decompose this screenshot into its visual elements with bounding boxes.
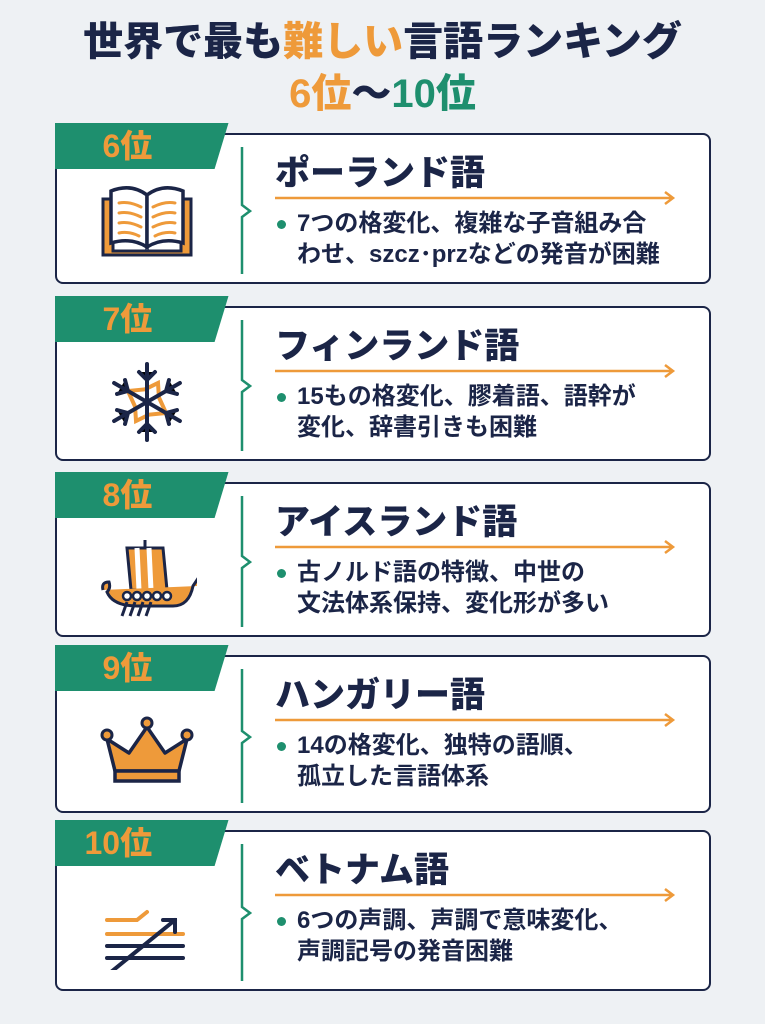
heading: ハンガリー語 <box>275 676 485 715</box>
divider line <box>240 320 252 451</box>
arrow <box>275 713 675 727</box>
text: 変化、辞書引きも困難 <box>297 414 537 441</box>
icon: viking ship <box>101 540 197 616</box>
tab: 10位 <box>54 820 228 866</box>
text: わせ、szcz･przなどの発音が困難 <box>297 241 660 268</box>
arrow <box>275 540 675 554</box>
title <box>83 20 682 116</box>
text: 7つの格変化、複雑な子音組み合 <box>297 210 646 237</box>
text: 14の格変化、独特の語順、 <box>297 732 588 759</box>
tab: 6位 <box>54 123 228 169</box>
tab: 8位: 8位 <box>102 477 152 513</box>
text: 声調記号の発音困難 <box>297 938 513 965</box>
icon: crown <box>100 716 194 783</box>
panel: rank 8 <box>55 482 711 637</box>
tab: 8位 <box>54 472 228 518</box>
tab: 10位: 10位 <box>84 825 152 861</box>
panel: rank 7 <box>55 306 711 461</box>
divider line <box>240 147 252 274</box>
title: 世界で最も難しい言語ランキング <box>83 20 682 64</box>
panel: rank 10 <box>55 830 711 991</box>
divider line <box>240 496 252 627</box>
divider line <box>240 844 252 981</box>
text: 古ノルド語の特徴、中世の <box>297 559 585 586</box>
panel: rank 6 <box>55 133 711 284</box>
tab: 9位 <box>54 645 228 691</box>
heading: ポーランド語 <box>275 154 485 193</box>
panel: rank 9 <box>55 655 711 813</box>
divider line <box>240 669 252 803</box>
text: 孤立した言語体系 <box>297 763 489 790</box>
icon: snowflake <box>112 362 182 442</box>
tab: 9位: 9位 <box>102 650 152 686</box>
text <box>275 905 622 967</box>
tab: 7位: 7位 <box>102 301 152 337</box>
text <box>275 730 588 792</box>
icon: book <box>102 186 192 256</box>
title: 6位〜10位 <box>289 72 476 116</box>
icon: tones <box>105 910 185 970</box>
heading: フィンランド語 <box>275 327 519 366</box>
heading: アイスランド語 <box>275 503 517 542</box>
text <box>275 381 636 443</box>
text <box>275 557 609 619</box>
tab: 6位: 6位 <box>102 128 152 164</box>
text: 15もの格変化、膠着語、語幹が <box>297 383 636 410</box>
arrow <box>275 888 675 902</box>
arrow <box>275 191 675 205</box>
heading: ベトナム語 <box>275 851 449 890</box>
text: 文法体系保持、変化形が多い <box>297 590 609 617</box>
arrow <box>275 364 675 378</box>
text <box>275 208 660 270</box>
text: 6つの声調、声調で意味変化、 <box>297 907 622 934</box>
tab: 7位 <box>54 296 228 342</box>
